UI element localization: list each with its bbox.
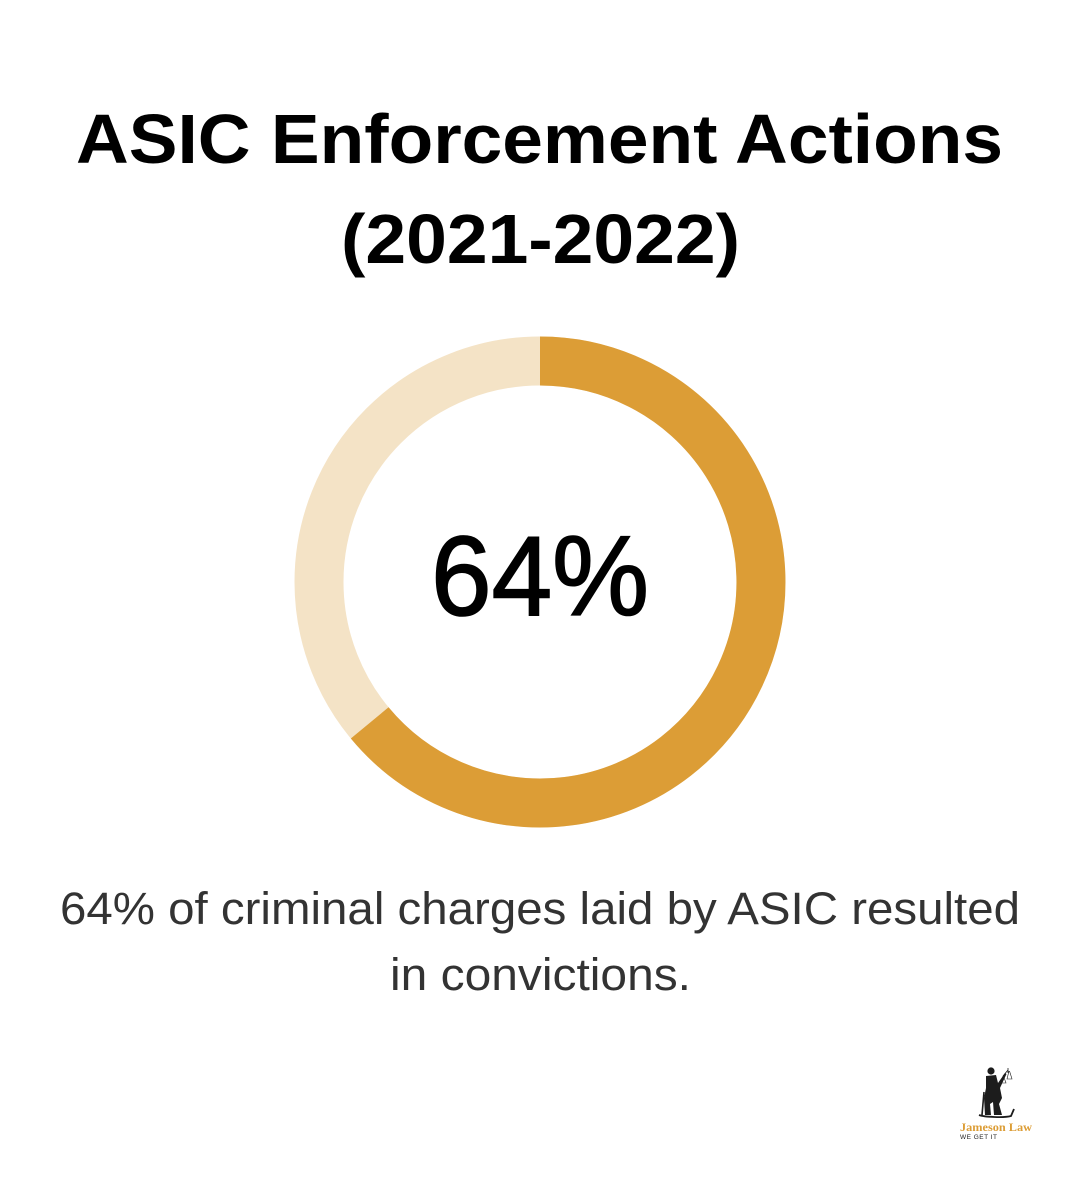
donut value arc bbox=[370, 361, 761, 803]
title bbox=[76, 100, 1003, 278]
donut track bbox=[319, 361, 761, 803]
icon: lady justice bbox=[979, 1067, 1014, 1117]
logo tagline: WE GET IT bbox=[960, 1134, 997, 1141]
logo name: Jameson Law bbox=[960, 1122, 1033, 1134]
title: (2021-2022) bbox=[341, 200, 740, 278]
donut centre value: 64% bbox=[431, 513, 649, 639]
description text: in convictions. bbox=[390, 949, 691, 1000]
description text: 64% of criminal charges laid by ASIC resulted bbox=[60, 883, 1020, 934]
title: ASIC Enforcement Actions bbox=[76, 100, 1003, 178]
logo: Jameson Law bbox=[960, 1067, 1033, 1141]
donut chart: 64% bbox=[319, 361, 761, 803]
description text bbox=[60, 883, 1020, 1000]
